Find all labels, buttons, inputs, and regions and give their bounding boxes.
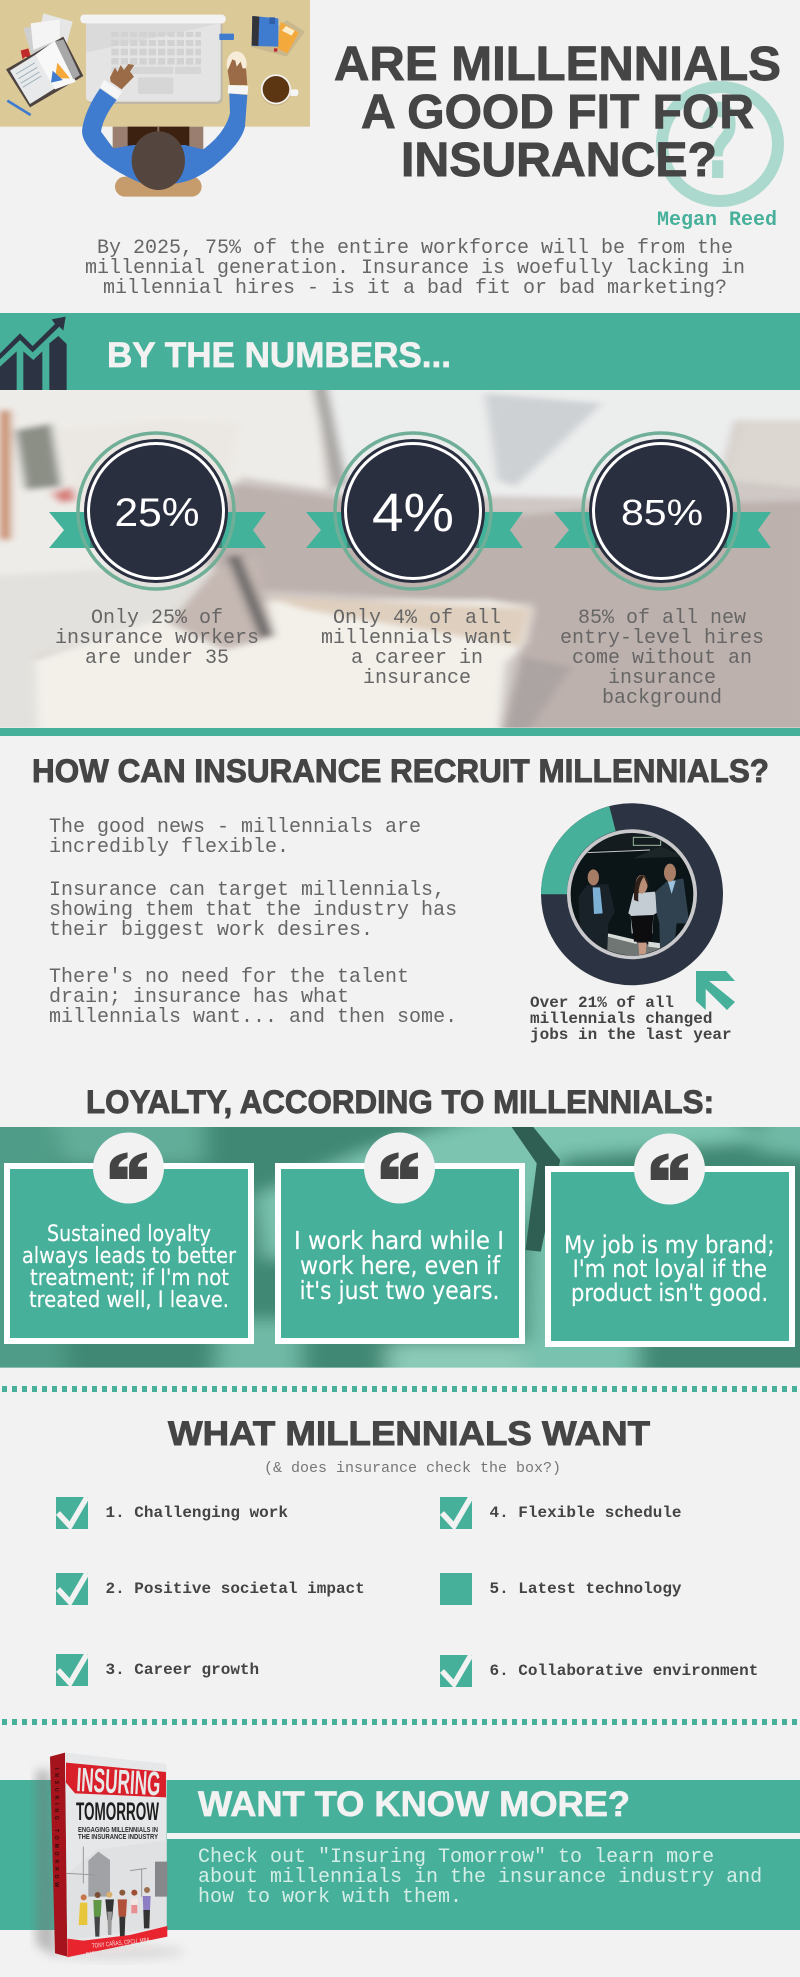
item 4: 4. Flexible schedule bbox=[490, 1504, 682, 1522]
panel: loyalty photo background bbox=[0, 1127, 800, 1368]
photo: three business people bbox=[570, 830, 697, 960]
donut caption bbox=[530, 994, 732, 1044]
body text: about millennials in the insurance industry and bbox=[198, 1866, 762, 1889]
stat caption: 25%: insurance workers bbox=[55, 627, 259, 650]
stat caption: 4% bbox=[321, 607, 513, 690]
icon: pen bbox=[7, 101, 31, 115]
stat caption: 85%: 85% of all new bbox=[578, 607, 746, 630]
cuffs bbox=[100, 80, 248, 99]
seat bbox=[115, 177, 202, 197]
cover authors: TONY CAÑAS, CPCU, MBA bbox=[91, 1935, 151, 1950]
donut caption: millennials changed bbox=[530, 1010, 712, 1028]
head bbox=[132, 131, 185, 190]
item 3: 3. Career growth bbox=[106, 1661, 259, 1679]
quote card 3: My job is my brand; bbox=[564, 1231, 774, 1259]
title bbox=[334, 38, 781, 187]
author: Megan Reed bbox=[657, 209, 777, 232]
item 2: 2. Positive societal impact bbox=[106, 1580, 365, 1598]
item 3 bbox=[56, 1654, 259, 1686]
heading: loyalty: LOYALTY, ACCORDING TO MILLENNIALS: bbox=[86, 1084, 714, 1120]
stat caption: 4%: Only 4% of all bbox=[333, 607, 501, 630]
cover authors bbox=[84, 1935, 154, 1959]
stat badge: 85% bbox=[554, 433, 771, 589]
red footer block bbox=[67, 1926, 167, 1957]
body text: recruit: incredibly flexible. bbox=[49, 836, 289, 859]
chair back bbox=[113, 127, 203, 150]
icon: stacked books bbox=[250, 16, 305, 57]
donut caption: Over 21% of all bbox=[530, 994, 674, 1012]
intro text: millennial generation. Insurance is woefully lacking in bbox=[85, 257, 745, 280]
laptop bbox=[80, 15, 226, 104]
heading: what millennials want: WHAT MILLENNIALS WANT bbox=[168, 1415, 650, 1453]
quote card 1: treated well, I leave. bbox=[29, 1288, 229, 1313]
intro text: By 2025, 75% of the entire workforce will be from the bbox=[97, 237, 733, 260]
stat caption: 85%: background bbox=[602, 687, 722, 710]
item 4 bbox=[440, 1497, 682, 1529]
front cover bbox=[65, 1753, 167, 1957]
heading: recruit: HOW CAN INSURANCE RECRUIT MILLENNIALS? bbox=[32, 753, 769, 789]
stat badge: 4% bbox=[306, 433, 523, 589]
cover subtitle: THE INSURANCE INDUSTRY bbox=[78, 1834, 158, 1841]
body text: recruit: their biggest work desires. bbox=[49, 919, 373, 942]
spine bbox=[50, 1753, 67, 1957]
spine title: INSURING TOMORROW bbox=[53, 1768, 59, 1890]
icon: papers bbox=[23, 13, 73, 55]
body text: recruit: drain; insurance has what bbox=[49, 986, 349, 1009]
donut chart: 21% bbox=[541, 803, 723, 985]
cover authors: CARLY BURNHAM, CPCU, MBA bbox=[86, 1944, 154, 1959]
quote card 2: it's just two years. bbox=[300, 1276, 500, 1305]
icon: mouse bbox=[227, 51, 247, 77]
body text: how to work with them. bbox=[198, 1886, 462, 1909]
hands bbox=[110, 59, 247, 89]
item 6: 6. Collaborative environment bbox=[490, 1662, 758, 1680]
stat caption: 25%: Only 25% of bbox=[91, 607, 223, 630]
intro text bbox=[85, 237, 745, 300]
stat badge: 25%: 25% bbox=[114, 491, 200, 535]
body text: recruit: showing them that the industry has bbox=[49, 899, 457, 922]
icon: coffee cup bbox=[261, 74, 298, 106]
red title block bbox=[66, 1763, 166, 1797]
stat caption: 85%: entry-level hires bbox=[560, 627, 764, 650]
quote card 3: product isn't good. bbox=[571, 1279, 768, 1307]
stat caption: 25% bbox=[55, 607, 259, 670]
icon: growth chart bbox=[0, 317, 67, 391]
teal divider bbox=[0, 728, 800, 736]
blue sweater bbox=[82, 88, 247, 183]
quote card 2 bbox=[278, 1132, 522, 1341]
body text: Check out "Insuring Tomorrow" to learn more bbox=[198, 1846, 714, 1869]
body text: recruit: millennials want... and then some. bbox=[49, 1006, 457, 1029]
arrow bbox=[696, 971, 735, 1010]
item 1 bbox=[56, 1497, 288, 1529]
quote card 1: always leads to better bbox=[22, 1244, 237, 1269]
stat caption: 25%: are under 35 bbox=[85, 647, 229, 670]
item 1: 1. Challenging work bbox=[106, 1504, 288, 1522]
book cover bbox=[36, 1753, 185, 1960]
stat caption: 4%: millennials want bbox=[321, 627, 513, 650]
quote card 3 bbox=[548, 1134, 792, 1344]
quote card 2: I work hard while I bbox=[294, 1226, 504, 1255]
icon: question mark ring: ? bbox=[700, 83, 738, 199]
quote card 3: I'm not loyal if the bbox=[572, 1255, 767, 1283]
stat caption: 85%: insurance bbox=[608, 667, 716, 690]
item 5 bbox=[440, 1573, 682, 1605]
item 6 bbox=[440, 1655, 758, 1687]
buildings bbox=[67, 1847, 167, 1897]
stat badge: 85%: 85% bbox=[621, 492, 703, 533]
stat badge: 25% bbox=[49, 433, 266, 589]
cover title: Tomorrow: TOMORROW bbox=[76, 1798, 159, 1826]
quote card 1: Sustained loyalty bbox=[47, 1222, 211, 1247]
body text: recruit bbox=[49, 816, 457, 1029]
panel: stats photo background bbox=[0, 377, 800, 743]
header illustration: person at desk bbox=[0, 0, 310, 197]
quote card 2: work here, even if bbox=[300, 1251, 501, 1280]
stat caption: 85%: come without an bbox=[572, 647, 752, 670]
body text bbox=[198, 1846, 762, 1909]
cover title: Insuring: INSURING bbox=[76, 1761, 161, 1803]
panel: want to know more bbox=[0, 1780, 800, 1930]
cover subtitle bbox=[78, 1827, 158, 1841]
subheading: (& does insurance check the box?) bbox=[264, 1460, 561, 1477]
cover subtitle: ENGAGING MILLENNIALS IN bbox=[78, 1827, 158, 1834]
title: INSURANCE? bbox=[401, 134, 717, 187]
body text: recruit: Insurance can target millennials, bbox=[49, 879, 445, 902]
item 2 bbox=[56, 1573, 365, 1605]
banner: by the numbers bbox=[0, 313, 800, 391]
checklist bbox=[56, 1497, 758, 1687]
intro text: millennial hires - is it a bad fit or bad marketing? bbox=[103, 277, 727, 300]
icon: open notebook with chart bbox=[6, 37, 83, 107]
stat badge: 4%: 4% bbox=[372, 483, 454, 543]
body text: recruit: The good news - millennials are bbox=[49, 816, 421, 839]
donut caption: jobs in the last year bbox=[530, 1026, 732, 1044]
icon: blue tab bbox=[219, 34, 234, 40]
stat caption: 85% bbox=[560, 607, 764, 710]
group of characters bbox=[79, 1887, 151, 1937]
icon: question mark ring bbox=[662, 83, 778, 201]
stat caption: 4%: a career in bbox=[351, 647, 483, 670]
title: A GOOD FIT FOR bbox=[361, 86, 754, 139]
quote card 1 bbox=[7, 1132, 251, 1341]
stat caption: 4%: insurance bbox=[363, 667, 471, 690]
body text: recruit: There's no need for the talent bbox=[49, 966, 409, 989]
item 5: 5. Latest technology bbox=[490, 1580, 682, 1598]
heading: WANT TO KNOW MORE? bbox=[198, 1785, 630, 1824]
banner heading: BY THE NUMBERS... bbox=[107, 336, 451, 375]
quote card 1: treatment; if I'm not bbox=[30, 1266, 229, 1291]
title: ARE MILLENNIALS bbox=[334, 38, 781, 91]
